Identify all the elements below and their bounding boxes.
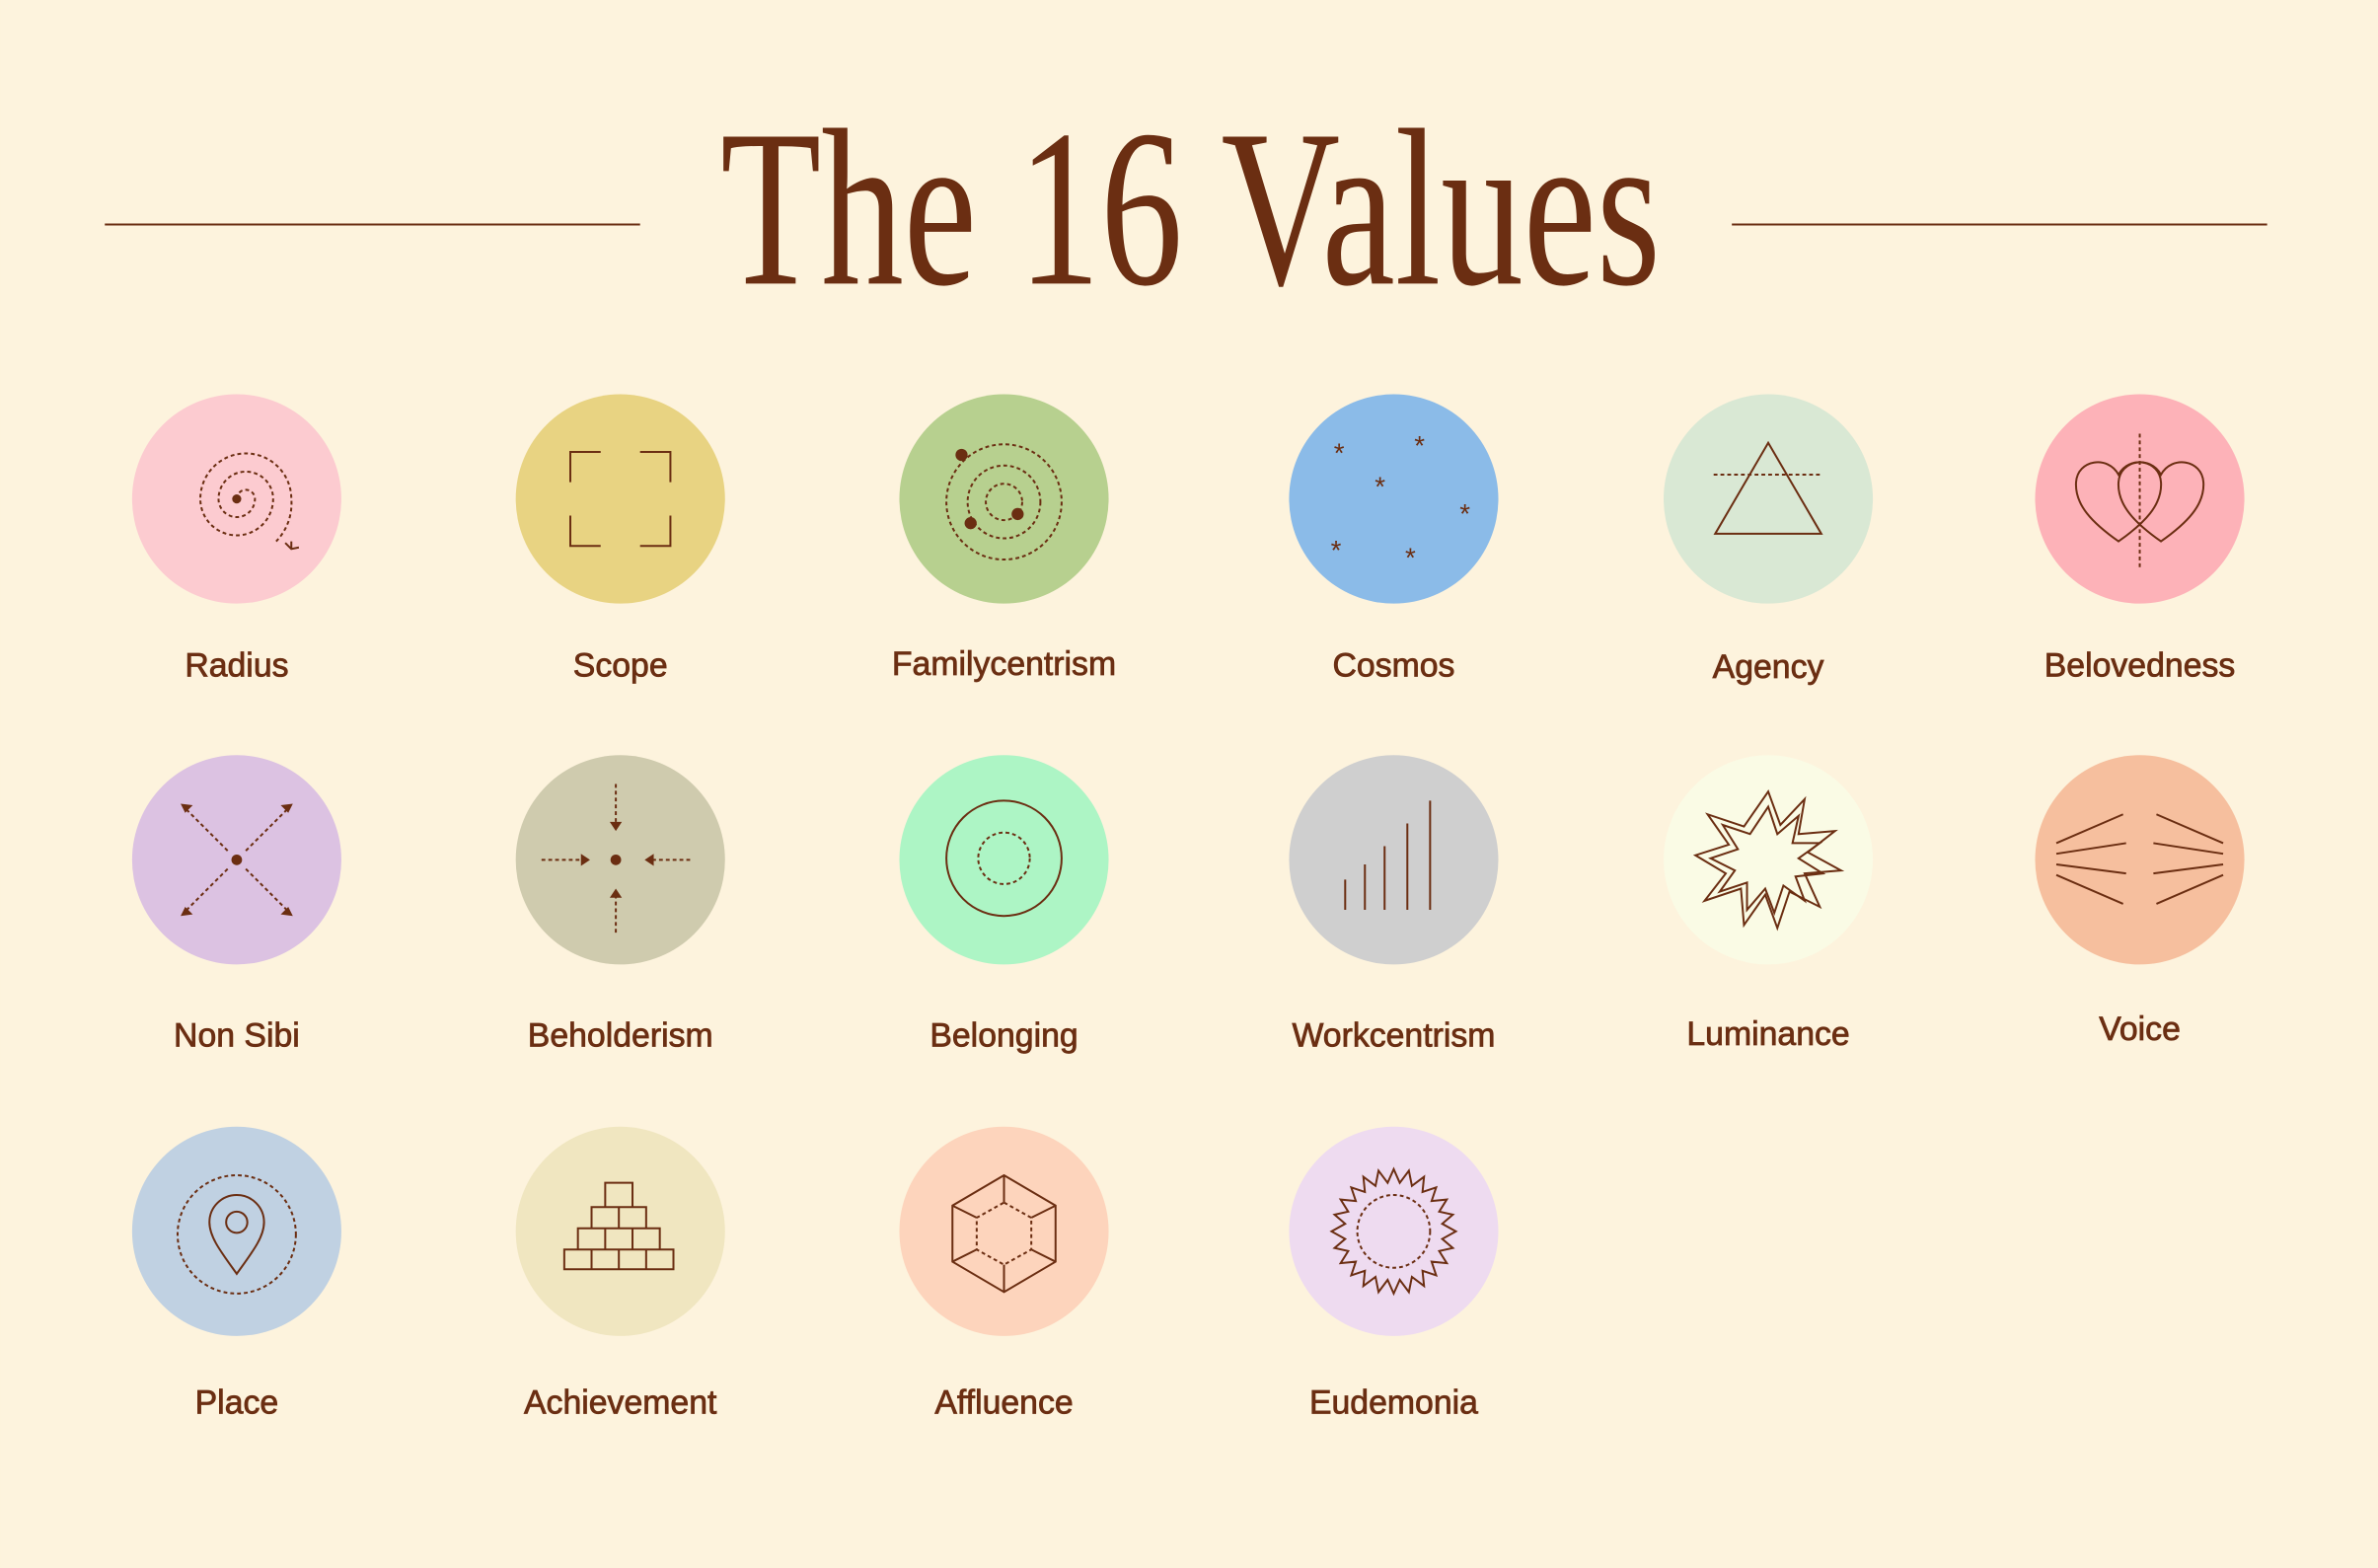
item: Familycentrism bbox=[892, 395, 1116, 683]
item: Affluence: Affluence bbox=[934, 1383, 1074, 1421]
item: Belovedness: Belovedness bbox=[2044, 646, 2235, 684]
item: Scope bbox=[516, 395, 725, 684]
title: The 16 Values bbox=[720, 84, 1661, 333]
item: Luminance: Luminance bbox=[1686, 1015, 1850, 1053]
item: Radius bbox=[132, 395, 341, 684]
item: Belovedness bbox=[2036, 395, 2245, 684]
item: Eudemonia: Eudemonia bbox=[1309, 1383, 1478, 1421]
item: Agency: Agency bbox=[1713, 648, 1824, 686]
item: Voice bbox=[2036, 755, 2245, 1048]
item: Agency bbox=[1664, 395, 1873, 686]
item: Achievement: Achievement bbox=[524, 1383, 717, 1421]
item: Voice: Voice bbox=[2099, 1010, 2181, 1048]
item: Place bbox=[132, 1127, 341, 1421]
item: Achievement bbox=[516, 1127, 725, 1421]
item: Radius: Radius bbox=[185, 646, 289, 684]
item: Cosmos bbox=[1289, 395, 1498, 684]
item: Cosmos: Cosmos bbox=[1332, 646, 1454, 684]
item: Affluence bbox=[899, 1127, 1109, 1421]
item: Beholderism: Beholderism bbox=[528, 1016, 713, 1054]
item: Cosmos: * bbox=[1414, 430, 1425, 461]
item: Non Sibi bbox=[132, 755, 341, 1054]
item: Cosmos: * bbox=[1459, 498, 1470, 529]
item: Non Sibi: Non Sibi bbox=[174, 1016, 300, 1054]
item: Familycentrism: Familycentrism bbox=[892, 645, 1116, 683]
item: Scope: Scope bbox=[573, 646, 668, 684]
item: Eudemonia bbox=[1289, 1127, 1498, 1421]
item: Luminance bbox=[1664, 755, 1873, 1053]
item: Cosmos: * bbox=[1331, 535, 1342, 565]
item: Belonging bbox=[899, 755, 1109, 1054]
item: Place: Place bbox=[195, 1383, 278, 1421]
item: Cosmos: * bbox=[1405, 543, 1416, 573]
item: Workcentrism bbox=[1289, 755, 1498, 1054]
item: Beholderism bbox=[516, 755, 725, 1054]
item: Cosmos: * bbox=[1334, 438, 1345, 469]
item: Workcentrism: Workcentrism bbox=[1292, 1016, 1495, 1054]
item: Belonging: Belonging bbox=[929, 1016, 1078, 1054]
item: Cosmos: * bbox=[1375, 472, 1385, 502]
